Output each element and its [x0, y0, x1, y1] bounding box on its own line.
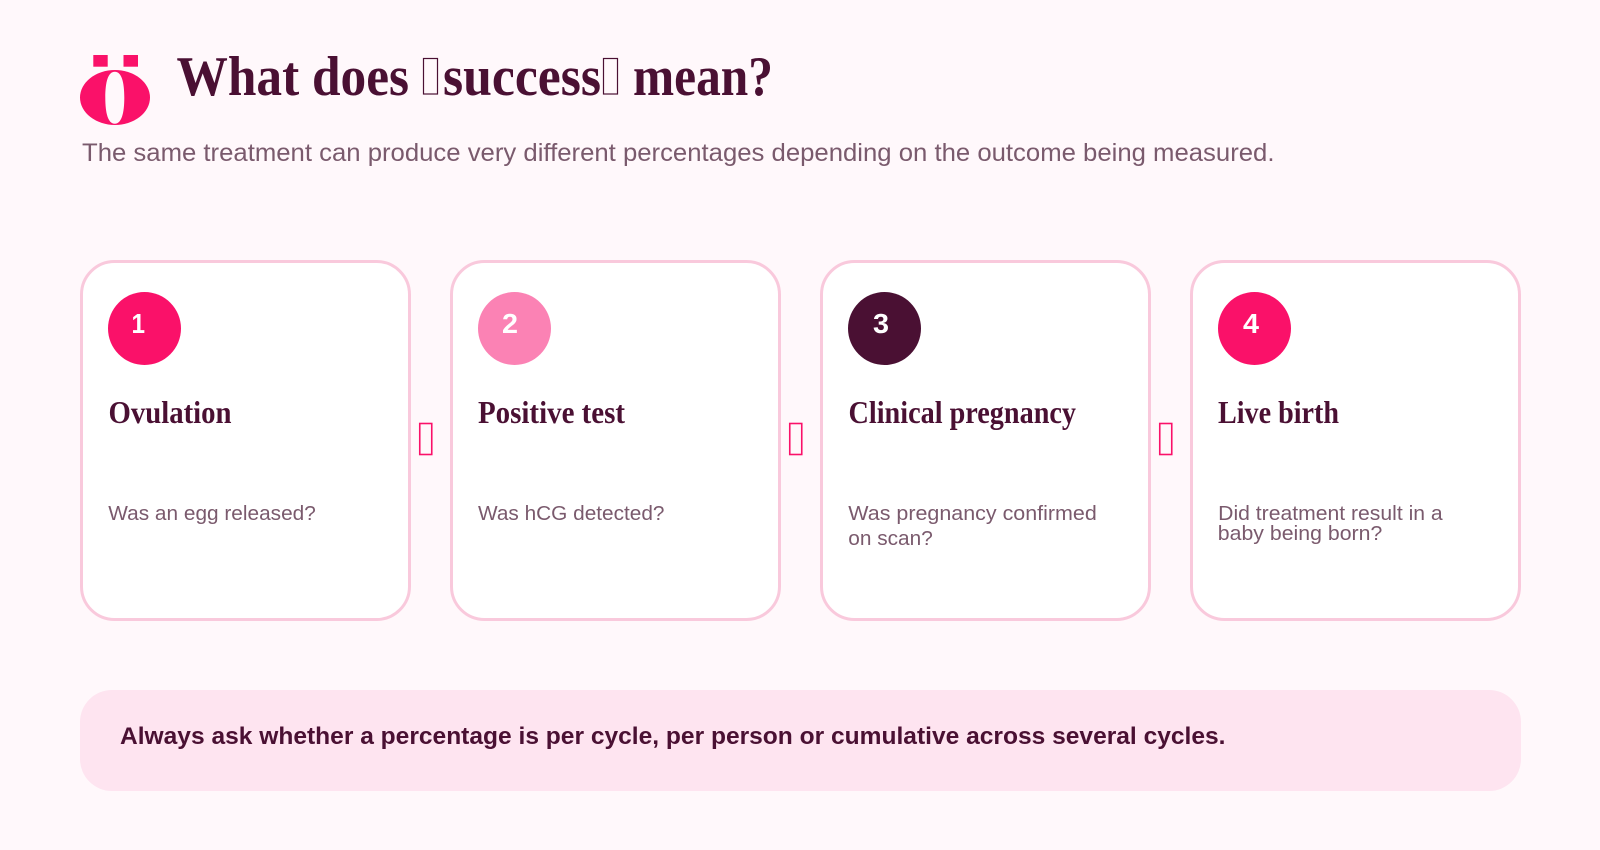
- panel: step 4 live birth: [1192, 262, 1520, 620]
- badge: number 4: 4: [1243, 308, 1259, 339]
- description: live birth: [1218, 502, 1443, 545]
- description: live birth: Did treatment result in a: [1218, 502, 1443, 525]
- heading: ovulation: Ovulation: [108, 394, 232, 430]
- callout text: Always ask whether a percentage is per cycle, per person or cumulative across several cycles.: [120, 723, 1226, 750]
- arrow placeholder 3: [1160, 424, 1172, 454]
- arrow placeholder 2: [790, 424, 802, 454]
- badge: number 1: [108, 292, 181, 365]
- title: mean?: [633, 46, 773, 108]
- badge: number 2: 2: [502, 308, 518, 339]
- arrow placeholder 1: [420, 424, 432, 454]
- title: What does: [176, 46, 409, 108]
- icon: letter-like pink mark: [80, 55, 150, 125]
- badge: number 4: [1218, 292, 1291, 365]
- description: positive test: Was hCG detected?: [478, 502, 664, 525]
- heading: positive test: Positive test: [478, 394, 625, 430]
- badge: number 3: [848, 292, 921, 365]
- description: live birth: baby being born?: [1218, 522, 1382, 545]
- callout: [80, 690, 1521, 791]
- heading: live birth: Live birth: [1218, 394, 1339, 430]
- description: clinical pregnancy: Was pregnancy confirmed: [848, 502, 1097, 525]
- badge: number 1: 1: [132, 308, 145, 339]
- description: ovulation: Was an egg released?: [108, 502, 316, 525]
- panel: step 2 positive test: [452, 262, 780, 620]
- panel: step 1 ovulation: [82, 262, 410, 620]
- description: clinical pregnancy: on scan?: [848, 527, 933, 550]
- panel: step 3 clinical pregnancy: [822, 262, 1150, 620]
- heading: clinical pregnancy: Clinical pregnancy: [848, 394, 1076, 430]
- subtitle: The same treatment can produce very different percentages depending on the outcome being measured.: [82, 139, 1274, 167]
- description: clinical pregnancy: [848, 502, 1097, 550]
- badge: number 3: 3: [873, 308, 889, 339]
- badge: number 2: [478, 292, 551, 365]
- title: [176, 46, 773, 108]
- title: success: [443, 46, 601, 108]
